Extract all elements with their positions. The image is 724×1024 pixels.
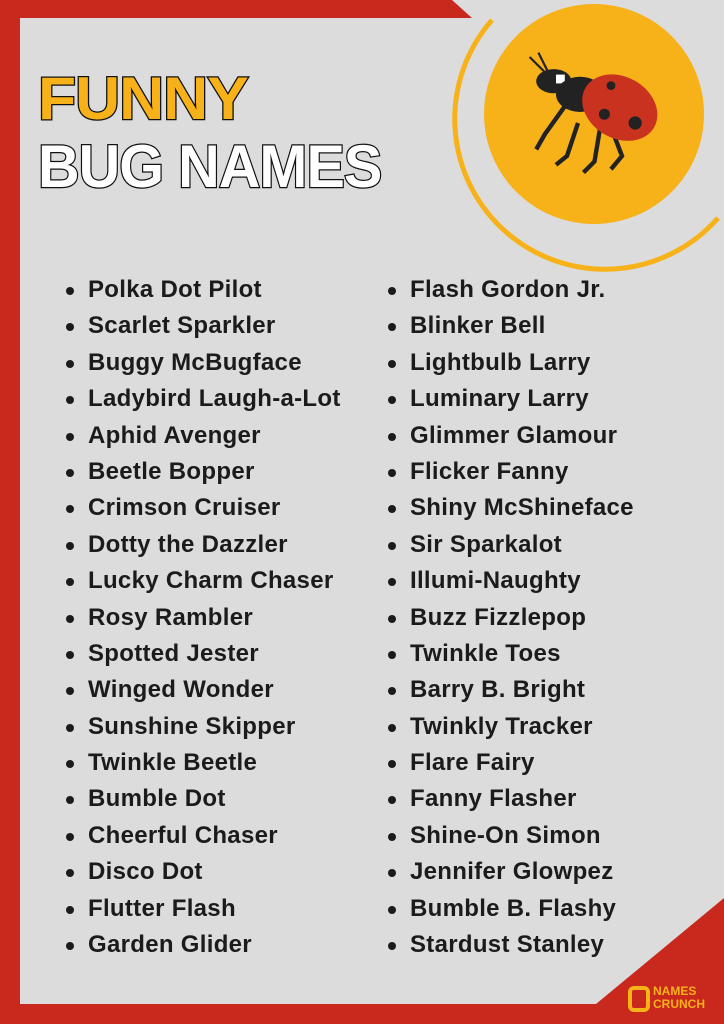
logo: names crunch: CRUNCH <box>653 997 705 1011</box>
list: column 2 <box>388 276 634 958</box>
list: column 2: Sir Sparkalot <box>410 531 562 558</box>
list: column 2: Buzz Fizzlepop <box>410 604 586 631</box>
list: column 1: Winged Wonder <box>88 676 274 703</box>
list: column 1: Beetle Bopper <box>88 458 255 485</box>
list: column 2: Bumble B. Flashy <box>410 895 616 922</box>
list: column 1: Buggy McBugface <box>88 349 302 376</box>
list: column 1: Spotted Jester <box>88 640 259 667</box>
list: column 1: Crimson Cruiser <box>88 494 281 521</box>
title: bug names: BUG NAMES <box>38 133 381 200</box>
list: column 1: Lucky Charm Chaser <box>88 567 334 594</box>
list: column 1: Ladybird Laugh-a-Lot <box>88 385 341 412</box>
list: column 2: Fanny Flasher <box>410 785 577 812</box>
list: column 2: Barry B. Bright <box>410 676 585 703</box>
list: column 1: Polka Dot Pilot <box>88 276 262 303</box>
icon: ladybug in yellow circle <box>452 4 720 272</box>
list: column 1: Dotty the Dazzler <box>88 531 288 558</box>
list: column 1: Bumble Dot <box>88 785 226 812</box>
list: column 2: Lightbulb Larry <box>410 349 590 376</box>
list: column 1: Flutter Flash <box>88 895 236 922</box>
list: column 2: Illumi-Naughty <box>410 567 581 594</box>
list: column 1: Aphid Avenger <box>88 422 261 449</box>
list: column 2: Shine-On Simon <box>410 822 601 849</box>
list: column 1: Rosy Rambler <box>88 604 253 631</box>
list: column 1: Disco Dot <box>88 858 203 885</box>
list: column 2: Twinkle Toes <box>410 640 561 667</box>
list: column 2: Jennifer Glowpez <box>410 858 614 885</box>
list: column 2: Flare Fairy <box>410 749 535 776</box>
list: column 1: Sunshine Skipper <box>88 713 296 740</box>
list: column 2: Blinker Bell <box>410 312 546 339</box>
list: column 1: Cheerful Chaser <box>88 822 278 849</box>
list: column 1: Scarlet Sparkler <box>88 312 276 339</box>
list: column 2: Glimmer Glamour <box>410 422 617 449</box>
logo: names crunch: NAMES <box>653 984 696 998</box>
list: column 1 <box>66 276 341 958</box>
title: funny: FUNNY <box>38 65 248 132</box>
list: column 2: Shiny McShineface <box>410 494 634 521</box>
list: column 2: Stardust Stanley <box>410 931 604 958</box>
list: column 1: Twinkle Beetle <box>88 749 257 776</box>
list: column 1: Garden Glider <box>88 931 252 958</box>
list: column 2: Flash Gordon Jr. <box>410 276 606 303</box>
list: column 2: Luminary Larry <box>410 385 589 412</box>
list: column 2: Flicker Fanny <box>410 458 569 485</box>
list: column 2: Twinkly Tracker <box>410 713 593 740</box>
logo: names crunch <box>628 984 705 1012</box>
